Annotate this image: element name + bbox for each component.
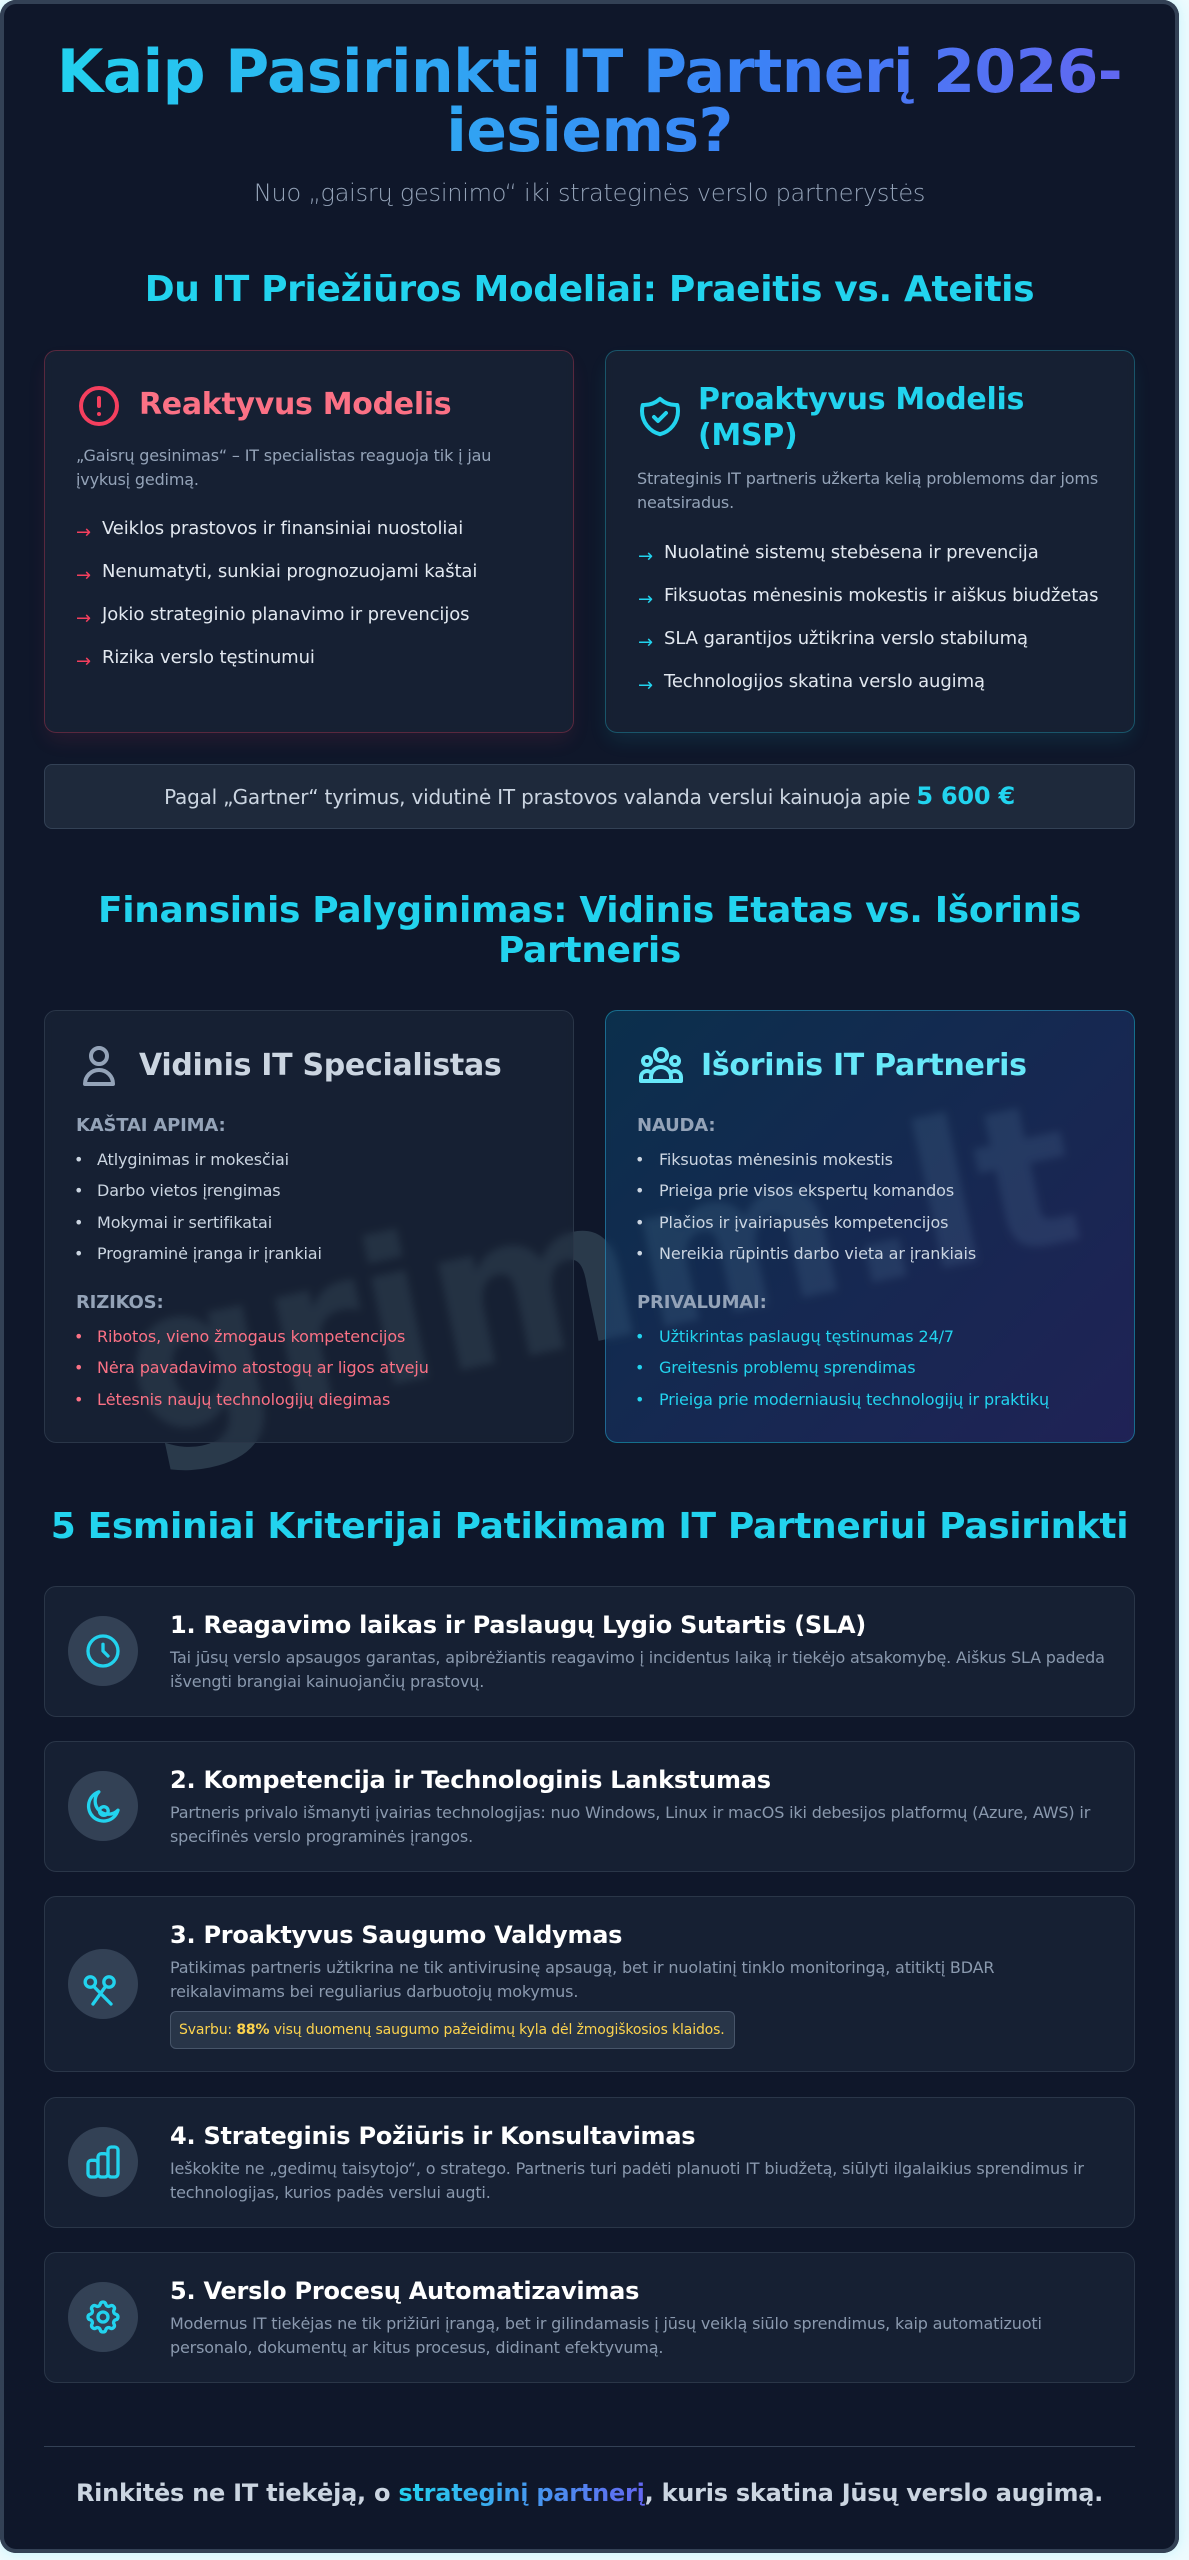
description: proactive: Strateginis IT partneris užkerta kelią problemoms dar joms [637,469,1098,488]
heading: external: Išorinis IT Partneris [701,1048,1027,1083]
list: risks: Nėra pavadavimo atostogų ar ligos atveju [97,1358,429,1377]
list: risks [76,1327,429,1409]
list: costs: Atlyginimas ir mokesčiai [97,1150,289,1169]
criterion 5 text: Modernus IT tiekėjas ne tik prižiūri įrangą, bet ir gilindamasis į jūsų veiklą siūlo sprendimus, kaip automatizuoti [170,2314,1042,2333]
list: proactive points: → [638,632,653,653]
criterion 2 text [170,1803,1090,1846]
criterion 3 [44,1896,1135,2072]
description: reactive: įvykusį gedimą. [76,470,199,489]
heading: reactive: Reaktyvus Modelis [139,387,451,422]
list: benefits: Nereikia rūpintis darbo vieta ar įrankiais [659,1244,976,1263]
criterion 1 text [170,1648,1105,1691]
criterion 2 title: 2. Kompetencija ir Technologinis Lankstumas [170,1766,771,1794]
section heading: financial comparison: Partneris [498,930,681,971]
panel: proactive model [605,350,1135,733]
list: costs [76,1150,322,1263]
list: reactive points: Veiklos prastovos ir finansiniai nuostoliai [102,518,463,539]
heading: proactive [698,382,1024,453]
list: proactive points: → [638,546,653,567]
icon: user group [639,1047,683,1083]
heading: proactive: (MSP) [698,418,797,453]
criterion 4 title: 4. Strateginis Požiūris ir Konsultavimas [170,2122,695,2150]
criterion 3 text [170,1958,994,2001]
section heading: financial comparison [98,890,1081,971]
icon: exclamation circle [79,386,119,426]
icon: cog [68,2282,138,2352]
list: proactive points: → [638,675,653,696]
list: costs: Darbo vietos įrengimas [97,1181,280,1200]
criterion 5 title: 5. Verslo Procesų Automatizavimas [170,2277,639,2305]
section heading: financial comparison: Finansinis Palyginimas: Vidinis Etatas vs. Išorinis [98,890,1081,931]
icon: crescent [68,1771,138,1841]
criterion 1 title: 1. Reagavimo laikas ir Paslaugų Lygio Sutartis (SLA) [170,1611,866,1639]
list: reactive points: Rizika verslo tęstinumui [102,647,315,668]
title: Kaip Pasirinkti IT Partnerį 2026- [57,37,1122,107]
list: risks: Lėtesnis naujų technologijų diegimas [97,1390,390,1409]
criterion 1 [44,1586,1135,1717]
description: proactive: neatsiradus. [637,493,734,512]
list: proactive points: Nuolatinė sistemų stebėsena ir prevencija [664,542,1039,563]
criterion 1 text: Tai jūsų verslo apsaugos garantas, apibrėžiantis reagavimo į incidentus laiką ir tiekėjo atsakomybę. Aiškus SLA padeda [170,1648,1105,1667]
description: reactive [76,446,491,489]
criterion 3 text: Patikimas partneris užtikrina ne tik antivirusinę apsaugą, bet ir nuolatinį tinklo monitoringą, atitiktį BDAR [170,1958,994,1977]
callout: downtime cost [44,764,1135,829]
list: reactive points: Jokio strateginio planavimo ir prevencijos [102,604,469,625]
list: proactive points: SLA garantijos užtikrina verslo stabilumą [664,628,1028,649]
criterion 4 text: technologijas, kurios padės verslui augti. [170,2183,491,2202]
list: reactive points: → [76,565,91,586]
list: benefits: Prieiga prie visos ekspertų komandos [659,1181,954,1200]
list: risks: Ribotos, vieno žmogaus kompetencijos [97,1327,405,1346]
list: advantages: Prieiga prie moderniausių technologijų ir praktikų [659,1390,1049,1409]
criterion 4 text [170,2159,1084,2202]
criterion 2 text: specifinės verslo programinės įrangos. [170,1827,473,1846]
list: reactive points: Nenumatyti, sunkiai prognozuojami kaštai [102,561,477,582]
criterion 3 title: 3. Proaktyvus Saugumo Valdymas [170,1921,622,1949]
watermark: grimm.lt [103,1056,1097,1485]
footer conclusion: Rinkitės ne IT tiekėją, o strateginį partnerį, kuris skatina Jūsų verslo augimą. [76,2479,1103,2507]
title [44,43,1135,161]
callout: 88 percent: Svarbu: 88% visų duomenų saugumo pažeidimų kyla dėl žmogiškosios klaidos. [179,2022,725,2038]
panel: reactive model [44,350,574,733]
list: costs: Mokymai ir sertifikatai [97,1213,272,1232]
section heading: models: Du IT Priežiūros Modeliai: Praeitis vs. Ateitis [145,269,1034,310]
subtitle: Nuo „gaisrų gesinimo“ iki strateginės verslo partnerystės [254,179,925,207]
callout: 88 percent [170,2011,735,2049]
heading: proactive: Proaktyvus Modelis [698,382,1024,417]
callout: downtime cost: Pagal „Gartner“ tyrimus, vidutinė IT prastovos valanda verslui kainuoja apie 5 600 € [164,782,1015,810]
criterion 4 [44,2097,1135,2228]
label: advantages: PRIVALUMAI: [637,1292,767,1313]
criterion 5 text [170,2314,1042,2357]
criterion 2 [44,1741,1135,1872]
description: reactive: „Gaisrų gesinimas“ – IT specialistas reaguoja tik į jau [76,446,491,465]
description: proactive [637,469,1098,512]
criterion 5 [44,2252,1135,2383]
list: proactive points: Technologijos skatina verslo augimą [664,671,985,692]
icon: scissors [68,1949,138,2019]
list: benefits [637,1150,976,1263]
list: reactive points: → [76,608,91,629]
list: advantages: Užtikrintas paslaugų tęstinumas 24/7 [659,1327,954,1346]
list: proactive points [638,542,1098,696]
section heading: criteria: 5 Esminiai Kriterijai Patikimam IT Partneriui Pasirinkti [51,1506,1128,1547]
label: risks: RIZIKOS: [76,1292,163,1313]
list: reactive points: → [76,651,91,672]
icon: bar chart [68,2127,138,2197]
icon: clock [68,1616,138,1686]
heading: internal: Vidinis IT Specialistas [139,1048,501,1083]
criterion 3 text: reikalavimams bei reguliarius darbuotojų mokymus. [170,1982,578,2001]
list: reactive points: → [76,522,91,543]
list: benefits: Fiksuotas mėnesinis mokestis [659,1150,893,1169]
criterion 1 text: išvengti brangiai kainuojančių prastovų. [170,1672,484,1691]
criterion 5 text: personalo, dokumentų ar kitus procesus, didinant efektyvumą. [170,2338,663,2357]
title: iesiems? [446,96,733,166]
panel: internal specialist [44,1010,574,1443]
icon: shield check [640,396,680,436]
label: benefits: NAUDA: [637,1115,715,1136]
label: costs: KAŠTAI APIMA: [76,1115,225,1136]
list: reactive points [76,518,477,672]
list: proactive points: Fiksuotas mėnesinis mokestis ir aiškus biudžetas [664,585,1098,606]
criterion 2 text: Partneris privalo išmanyti įvairias technologijas: nuo Windows, Linux ir macOS iki debesijos platformų (Azure, AWS) ir [170,1803,1090,1822]
list: advantages [637,1327,1049,1409]
list: advantages: Greitesnis problemų sprendimas [659,1358,915,1377]
panel: external partner [605,1010,1135,1443]
list: proactive points: → [638,589,653,610]
list: benefits: Plačios ir įvairiapusės kompetencijos [659,1213,948,1232]
list: costs: Programinė įranga ir įrankiai [97,1244,322,1263]
icon: user [83,1046,115,1086]
criterion 4 text: Ieškokite ne „gedimų taisytojo“, o stratego. Partneris turi padėti planuoti IT biudžetą, siūlyti ilgalaikius sprendimus ir [170,2159,1084,2178]
